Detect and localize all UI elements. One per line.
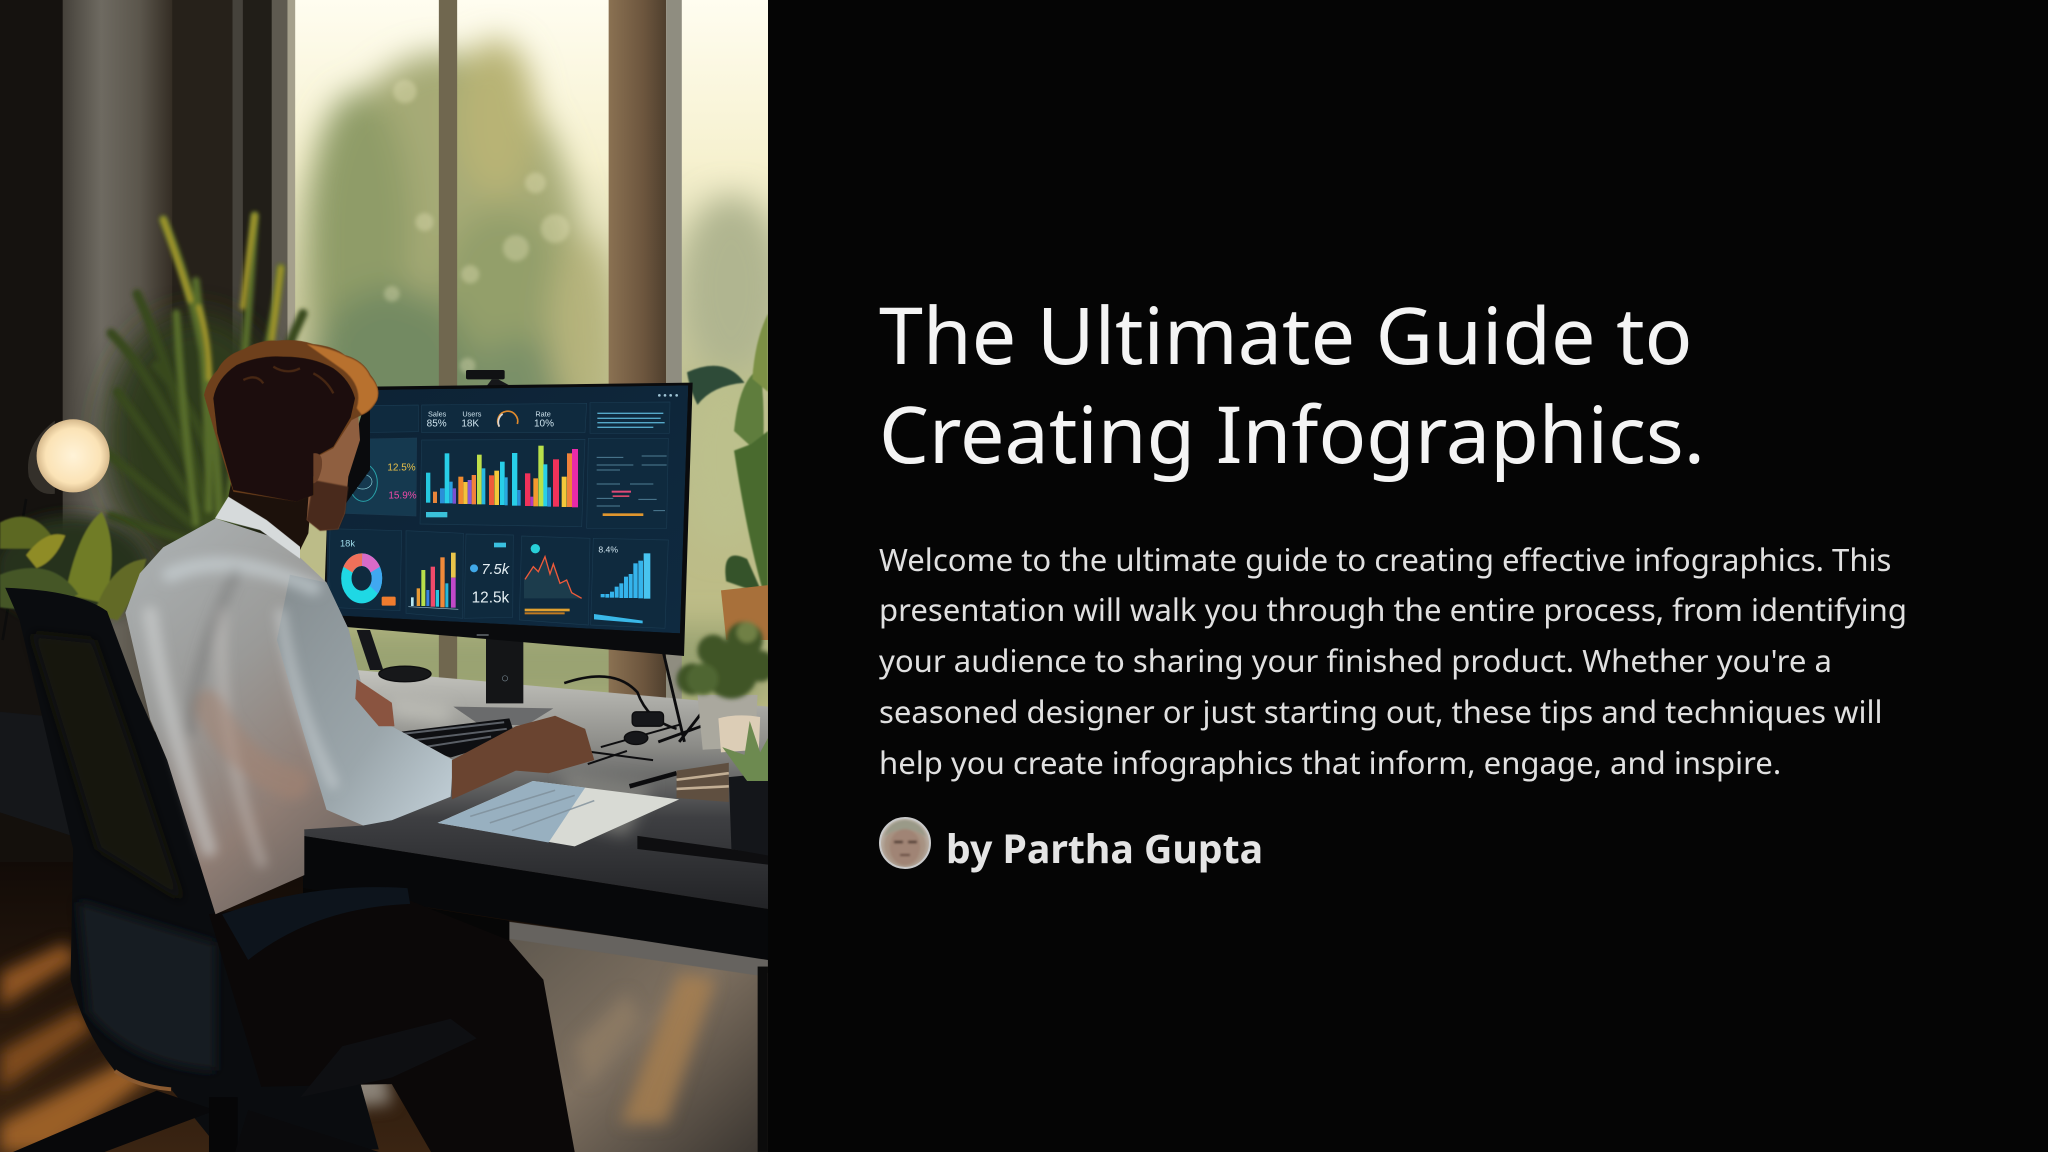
terracotta pot [721,585,768,640]
author byline [879,817,1263,875]
monitor with dashboard [323,370,693,725]
header dots [658,394,678,397]
wall and window frame [0,0,63,731]
dashboard panels [328,402,670,628]
stacked books [677,763,729,802]
KPI numbers: 12.5k [472,590,509,607]
desk sun patches [392,699,653,836]
intro paragraph: seasoned designer or just starting out, these tips and techniques will [879,691,1883,733]
man: trousers [209,888,575,1152]
side table highlights [603,491,643,516]
blue area bars [594,553,650,623]
dark pot and succulent [722,721,768,856]
right large plant [687,313,768,594]
photo: man at desk with data dashboard [0,0,768,1152]
small bar chart [408,553,458,609]
ring KPI numbers: 12.5% [387,463,416,474]
man: forearm and hands [355,679,594,799]
top KPI labels: Users [462,410,482,419]
sleeve [277,575,453,825]
collar [215,497,300,559]
window view with blurred trees [290,0,784,731]
webcam [466,370,509,386]
KPI numbers [340,539,618,607]
white pot [697,695,758,750]
orange button [382,597,396,606]
list lines top right [597,413,665,427]
top KPI labels: 18K [461,419,479,430]
intro paragraph [879,539,1907,784]
monitor bezel [323,383,693,656]
title: The Ultimate Guide to [879,281,1692,388]
top KPI labels: 10% [534,419,554,430]
top KPI labels [427,411,554,426]
lamp [3,419,110,640]
right side plants, pot and desk objects [637,585,776,865]
title [879,281,1705,487]
man: shirt [125,519,453,914]
donut chart [346,560,377,597]
line chart [524,544,582,614]
chair back and seat [5,588,379,1152]
lower left plant [0,512,150,620]
paper on desk [438,781,679,846]
KPI numbers: 7.5k [481,562,510,578]
top KPI labels: Rate [535,410,551,419]
side table lines [597,456,667,511]
dark bar and pen [637,836,768,865]
title: Creating Infographics. [879,380,1705,487]
ring KPI numbers [388,464,416,498]
intro paragraph: Welcome to the ultimate guide to creating effective infographics. This [879,539,1891,581]
chair armrest and base [13,887,477,1152]
window bokeh spots [384,80,569,374]
ring KPI numbers: 15.9% [388,491,417,502]
KPI numbers: 8.4% [598,545,618,555]
KPI numbers: 18k [340,539,355,549]
room background and window [0,0,784,1152]
intro paragraph: help you create infographics that inform, engage, and inspire. [879,742,1781,784]
man: head [204,340,379,559]
top KPI labels: 85% [427,419,447,430]
neck [228,473,313,550]
shirt folds [150,564,333,862]
avatar icon [879,817,931,869]
main bar chart [426,446,578,517]
intro paragraph: your audience to sharing your finished product. Whether you're a [879,640,1832,682]
left plant [104,216,313,562]
hair with curls [204,340,379,502]
top KPI labels: Sales [428,410,447,419]
dashboard screen [327,385,688,633]
monitor stand [357,630,553,725]
beard shadow [307,480,348,531]
keyboard [381,718,516,758]
coffee cup [718,715,760,752]
bushy plant [677,622,776,699]
face [307,417,360,531]
background cables and desk clutter [379,653,701,786]
ring widget [349,464,377,501]
intro paragraph: presentation will walk you through the entire process, from identifying [879,589,1907,631]
brand mark [477,634,489,636]
author name: by Partha Gupta [946,822,1263,875]
floor [0,862,768,1152]
desk [0,669,768,960]
gauge [498,411,518,427]
ear [313,453,322,483]
